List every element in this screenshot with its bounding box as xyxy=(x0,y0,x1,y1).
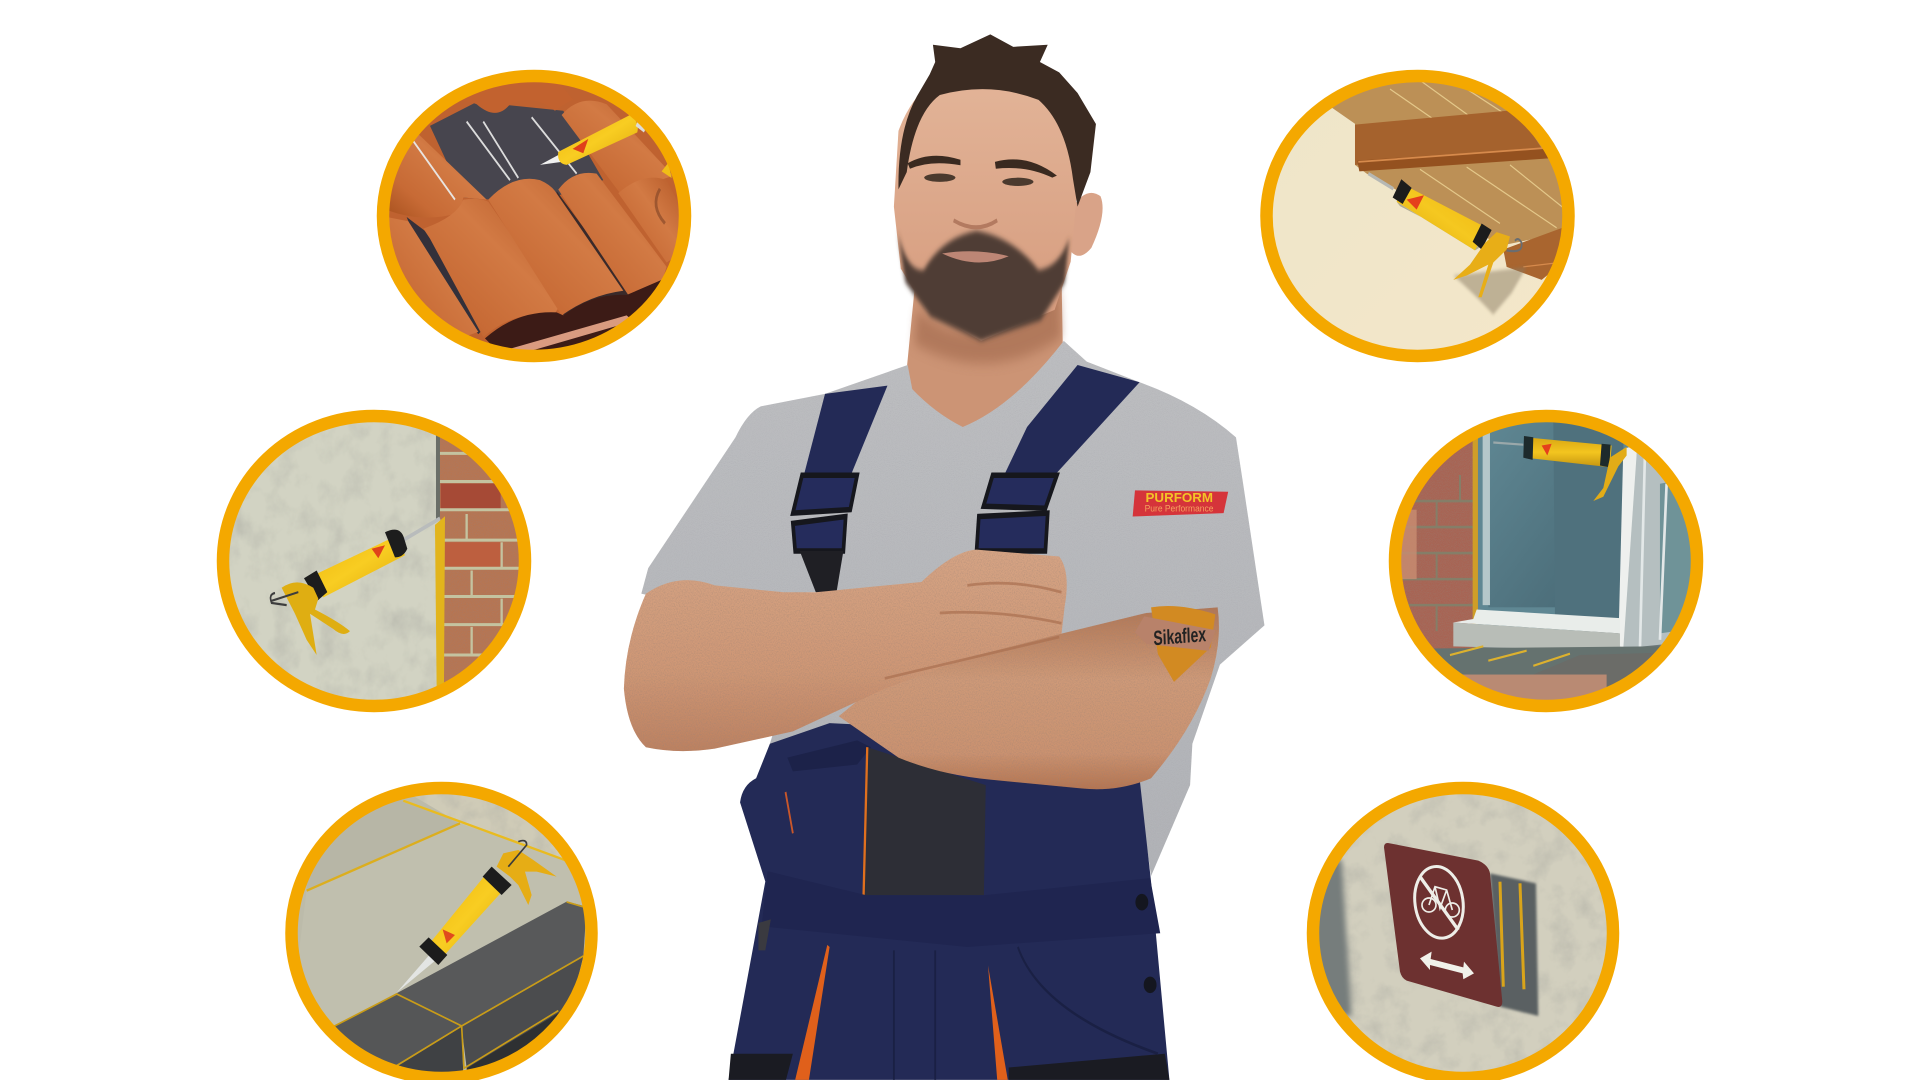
circle: paving and stone joint xyxy=(280,780,607,1080)
neck xyxy=(903,275,1078,451)
finger creases xyxy=(885,583,1061,678)
infographic canvas xyxy=(216,34,1704,1080)
nose shadow xyxy=(954,220,997,227)
worker figure xyxy=(624,34,1264,1080)
sleeve patch: Purform: Pure Performance xyxy=(1145,503,1213,514)
t-shirt xyxy=(641,341,1264,876)
circle: window frame joint xyxy=(1387,406,1707,718)
mouth xyxy=(942,251,1009,262)
hair xyxy=(898,34,1096,207)
eyebrows and eyes xyxy=(908,156,1057,186)
circle: roof tiles xyxy=(376,70,692,362)
sleeve patch: Purform xyxy=(1133,490,1228,517)
face xyxy=(894,65,1078,341)
tattoo: Sikaflex: Sikaflex xyxy=(1153,622,1207,650)
tattoo: Sikaflex xyxy=(1135,606,1215,682)
circle: sign mounted with adhesive xyxy=(1300,780,1627,1080)
ear xyxy=(1071,193,1103,256)
circle: concrete and brick joint xyxy=(213,406,540,718)
sleeve patch: Purform: PURFORM xyxy=(1146,491,1213,506)
circle: wood soffit joint xyxy=(1253,63,1580,375)
arm: right forearm and upper arm xyxy=(839,607,1219,789)
overall straps xyxy=(793,365,1140,592)
beard xyxy=(898,231,1069,341)
neck shadow xyxy=(915,289,1061,363)
overall body xyxy=(729,723,1169,1080)
arm: left forearm and hand xyxy=(624,550,1067,751)
